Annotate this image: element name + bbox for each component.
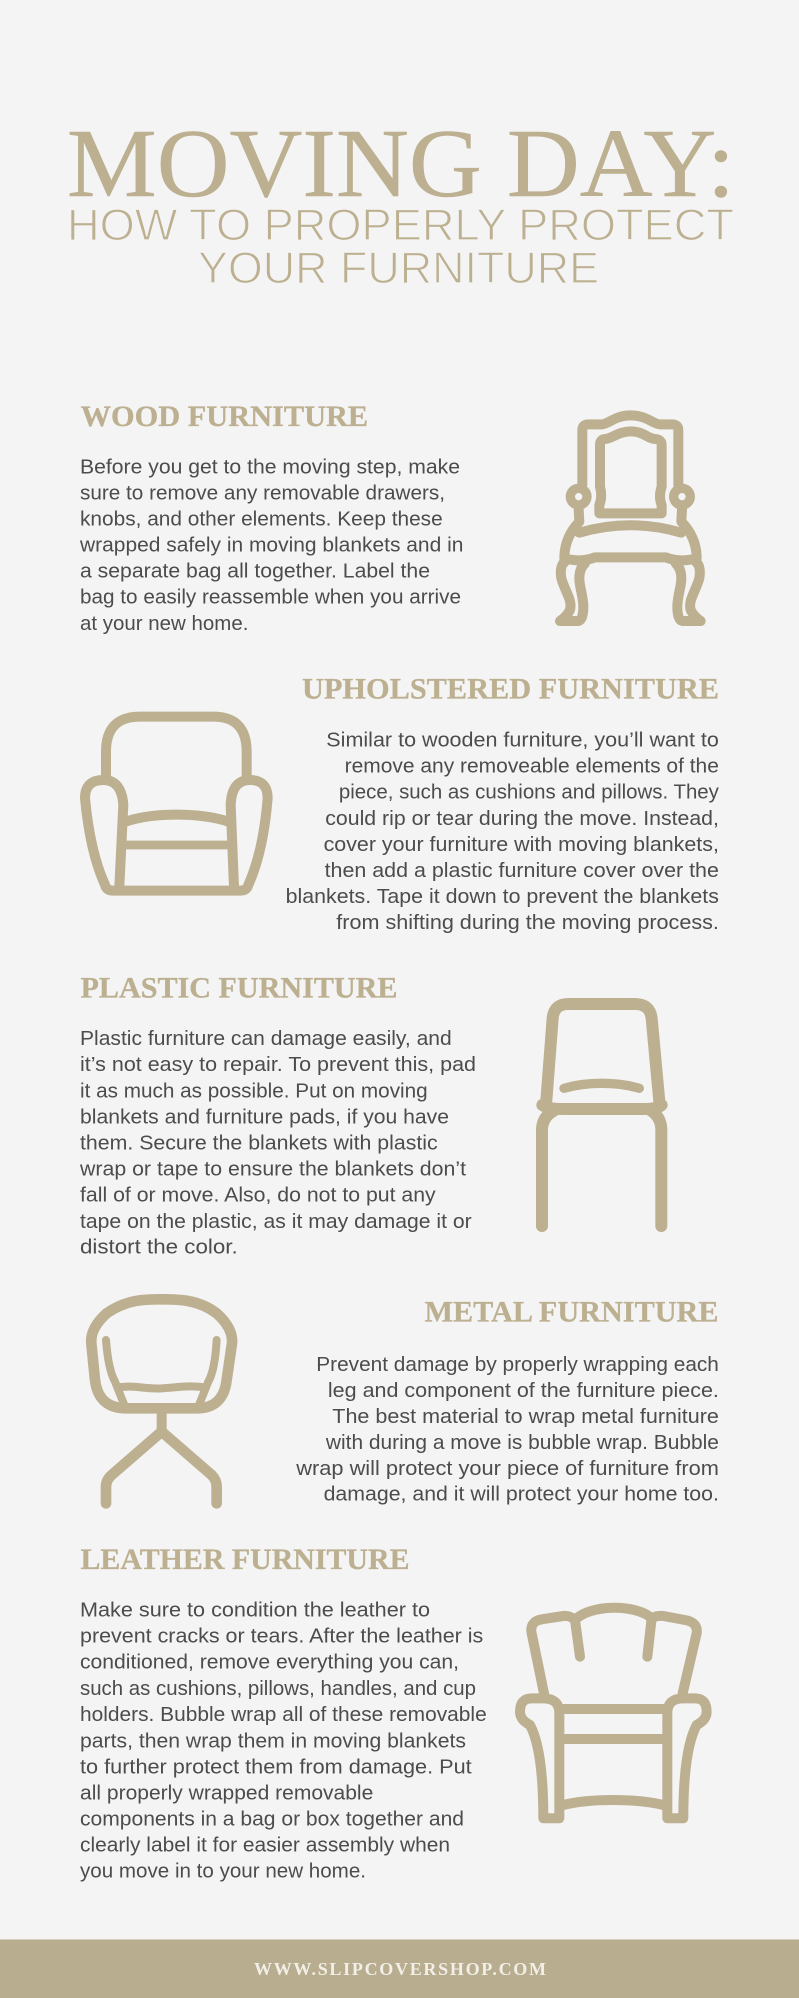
text block: wood furniture: wrapped safely in moving blankets and in: [79, 533, 463, 556]
subtitle: HOW TO PROPERLY PROTECT: [67, 201, 734, 250]
text block: wood furniture: knobs, and other elements. Keep these: [80, 507, 443, 530]
text block: metal furniture: with during a move is bubble wrap. Bubble: [325, 1431, 719, 1454]
text block: metal furniture: leg and component of the furniture piece.: [328, 1379, 719, 1402]
icon: wooden armchair: [560, 415, 701, 621]
text block: leather furniture: prevent cracks or tears. After the leather is: [80, 1625, 483, 1648]
heading: wood furniture: WOOD FURNITURE: [81, 400, 368, 433]
text block: plastic furniture: Plastic furniture can damage easily, and: [80, 1027, 452, 1050]
text block: upholstered furniture: could rip or tear during the move. Instead,: [325, 807, 719, 830]
text block: plastic furniture: fall of or move. Also, do not to put any: [80, 1184, 436, 1207]
panel: leather furniture: [80, 1543, 707, 1882]
text block: plastic furniture: wrap or tape to ensure the blankets don’t: [79, 1158, 466, 1180]
text block: metal furniture: The best material to wrap metal furniture: [332, 1405, 719, 1428]
title: [67, 110, 735, 293]
icon: upholstered armchair: [85, 717, 268, 891]
text block: leather furniture: you move in to your new home.: [80, 1859, 366, 1882]
text block: leather furniture: parts, then wrap them in moving blankets: [80, 1729, 466, 1752]
text block: wood furniture: sure to remove any removable drawers,: [80, 481, 445, 504]
heading: metal furniture: METAL FURNITURE: [424, 1296, 718, 1329]
icon: plastic chair: [542, 1004, 662, 1226]
text block: upholstered furniture: from shifting during the moving process.: [336, 911, 719, 934]
text block: leather furniture: components in a bag or box together and: [80, 1807, 464, 1830]
text block: leather furniture: [80, 1599, 487, 1882]
text block: wood furniture: Before you get to the moving step, make: [80, 455, 460, 478]
heading: upholstered furniture: UPHOLSTERED FURNITURE: [302, 672, 719, 705]
text block: wood furniture: a separate bag all together. Label the: [80, 560, 430, 582]
text block: leather furniture: holders. Bubble wrap all of these removable: [80, 1703, 487, 1726]
heading: leather furniture: LEATHER FURNITURE: [80, 1543, 410, 1576]
icon: metal swivel chair: [91, 1299, 232, 1503]
text block: plastic furniture: it’s not easy to repair. To prevent this, pad: [80, 1053, 476, 1076]
text block: upholstered furniture: cover your furniture with moving blankets,: [324, 833, 719, 856]
text block: metal furniture: [295, 1353, 719, 1506]
panel: wood furniture: [79, 400, 701, 635]
text block: upholstered furniture: Similar to wooden furniture, you’ll want to: [326, 729, 719, 752]
text block: upholstered furniture: piece, such as cushions and pillows. They: [339, 781, 720, 804]
panel: upholstered furniture: [85, 672, 720, 934]
panel: plastic furniture: [79, 972, 662, 1259]
panel: metal furniture: [91, 1296, 719, 1506]
text block: leather furniture: clearly label it for easier assembly when: [80, 1833, 450, 1856]
text block: plastic furniture: blankets and furniture pads, if you have: [80, 1105, 449, 1128]
text block: plastic furniture: tape on the plastic, as it may damage it or: [80, 1210, 472, 1233]
text block: upholstered furniture: then add a plastic furniture cover over the: [325, 859, 719, 882]
text block: plastic furniture: [79, 1027, 476, 1259]
text block: wood furniture: [79, 455, 463, 635]
heading: plastic furniture: PLASTIC FURNITURE: [80, 972, 398, 1005]
footer band: [0, 1940, 799, 1998]
text block: wood furniture: at your new home.: [80, 612, 248, 635]
text block: metal furniture: wrap will protect your piece of furniture from: [295, 1457, 719, 1480]
title: MOVING DAY:: [67, 110, 735, 218]
text block: leather furniture: all properly wrapped removable: [80, 1781, 373, 1804]
text block: leather furniture: conditioned, remove everything you can,: [80, 1651, 459, 1674]
text block: upholstered furniture: blankets. Tape it down to prevent the blankets: [286, 885, 719, 908]
text block: wood furniture: bag to easily reassemble when you arrive: [80, 586, 461, 608]
text block: upholstered furniture: [286, 729, 720, 934]
footer url: WWW.SLIPCOVERSHOP.COM: [254, 1959, 546, 1979]
text block: plastic furniture: it as much as possible. Put on moving: [80, 1079, 428, 1102]
text block: metal furniture: damage, and it will protect your home too.: [324, 1483, 719, 1506]
text block: metal furniture: Prevent damage by properly wrapping each: [316, 1353, 719, 1376]
text block: plastic furniture: them. Secure the blankets with plastic: [80, 1131, 438, 1154]
text block: upholstered furniture: remove any removeable elements of the: [345, 755, 719, 778]
text block: leather furniture: to further protect them from damage. Put: [80, 1755, 472, 1778]
text block: leather furniture: Make sure to condition the leather to: [80, 1599, 430, 1622]
subtitle: YOUR FURNITURE: [198, 244, 599, 293]
text block: plastic furniture: distort the color.: [80, 1236, 238, 1259]
icon: leather armchair: [520, 1608, 707, 1818]
text block: leather furniture: such as cushions, pillows, handles, and cup: [80, 1677, 476, 1700]
subtitle: [67, 201, 734, 293]
